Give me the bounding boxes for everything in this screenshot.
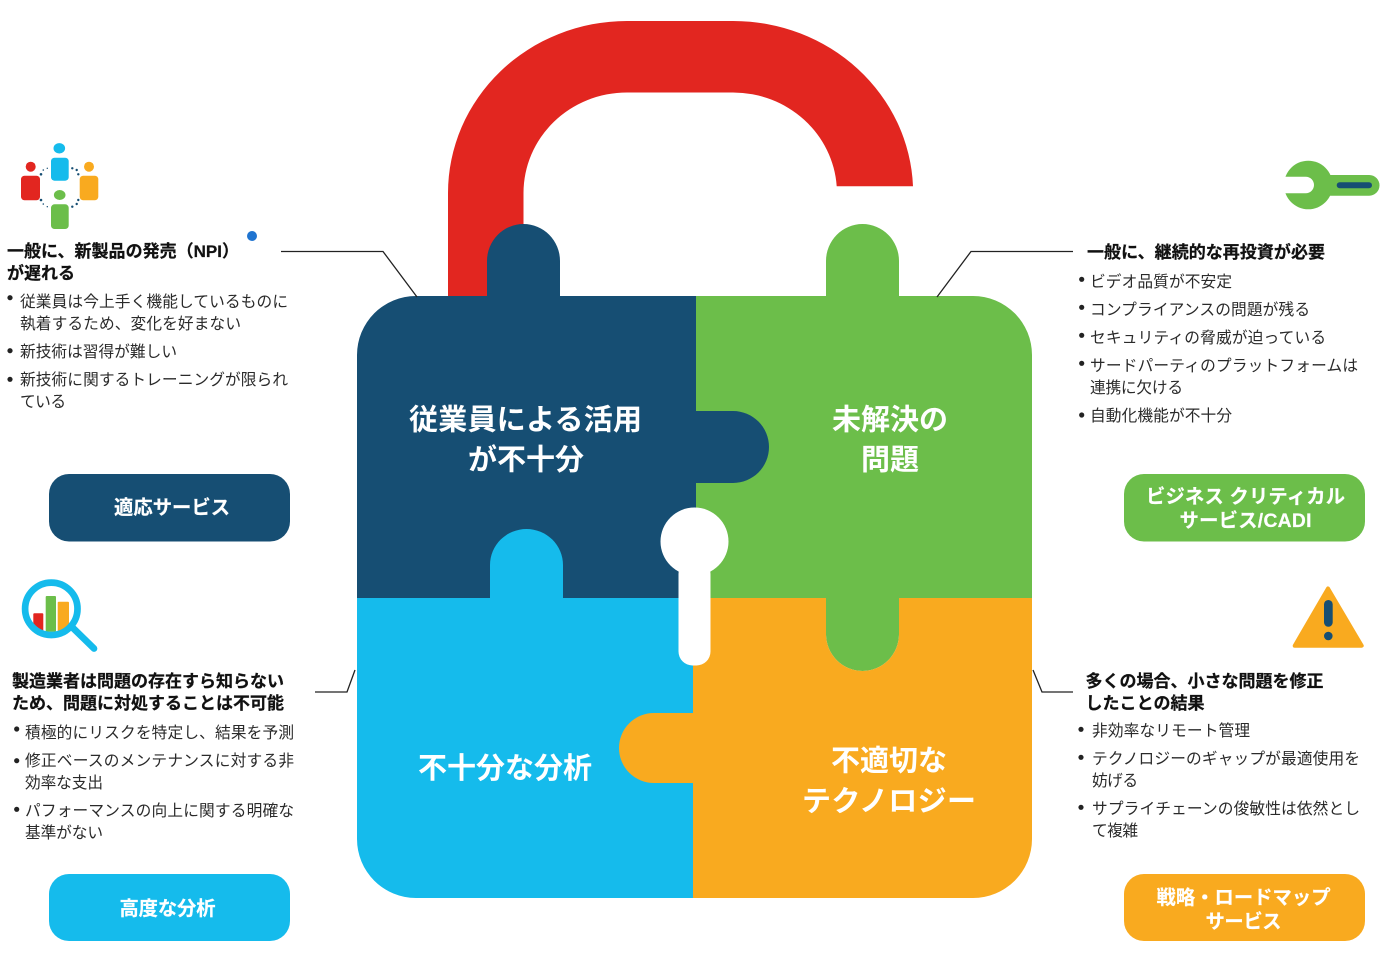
bullets: bottom right: 非効率なリモート管理	[1092, 722, 1250, 740]
bullets: top left: ている	[20, 394, 66, 411]
bullets: top right: ビデオ品質が不安定	[1090, 272, 1232, 291]
bullets: bottom right: て複雑	[1092, 822, 1138, 840]
heading: top right: 一般に、継続的な再投資が必要	[1087, 242, 1325, 262]
bullets: bottom left: 積極的にリスクを特定し、結果を予測	[25, 724, 294, 742]
button: business critical services / CADI: ビジネス クリティカル	[1146, 486, 1345, 508]
bullets: top right	[1079, 272, 1358, 425]
puzzle piece: orange, inadequate technology	[619, 598, 1032, 898]
text block: top left	[7, 241, 288, 411]
puzzle piece: green, unresolved issues	[696, 224, 1032, 671]
bullets: top left	[7, 293, 288, 411]
puzzle piece: light blue, insufficient analysis	[357, 529, 693, 898]
bullets: top right: 自動化機能が不十分	[1090, 407, 1232, 425]
padlock puzzle body	[357, 224, 1032, 898]
button: business critical services / CADI	[1124, 474, 1365, 542]
bullets: bottom left: 基準がない	[25, 824, 103, 842]
bullets: bottom right: 妨げる	[1092, 772, 1138, 790]
puzzle label: green: 問題	[861, 444, 919, 476]
heading: bottom right	[1086, 671, 1324, 713]
icon: people circle	[21, 143, 98, 229]
button: adaptive services: 適応サービス	[114, 497, 230, 519]
keyhole	[660, 508, 728, 666]
text block: top right	[1079, 242, 1358, 425]
puzzle label: orange: 不適切な	[831, 744, 947, 778]
bullets: bottom left: 修正ベースのメンテナンスに対する非	[25, 752, 294, 770]
button: strategy and roadmap services	[1124, 874, 1365, 941]
puzzle piece: navy, underused employees	[357, 224, 769, 598]
puzzle label: navy: が不十分	[468, 442, 584, 476]
button: advanced analytics: 高度な分析	[120, 897, 216, 920]
text block: bottom right	[1078, 671, 1360, 840]
bullets: bottom left: パフォーマンスの向上に関する明確な	[25, 802, 294, 820]
bullets: top right: コンプライアンスの問題が残る	[1090, 301, 1310, 319]
puzzle label: light blue: 不十分な分析	[418, 752, 592, 785]
padlock shackle	[448, 21, 913, 300]
bullets: top right: サードパーティのプラットフォームは	[1090, 357, 1358, 375]
bullets: bottom right: テクノロジーのギャップが最適使用を	[1092, 750, 1360, 768]
puzzle label: navy: 従業員による活用	[409, 404, 642, 436]
icon: warning triangle	[1295, 588, 1362, 646]
heading: bottom left: ため、問題に対処することは不可能	[12, 693, 284, 713]
connector line: bottom left	[315, 670, 355, 692]
bullets: bottom right	[1078, 722, 1360, 840]
puzzle label: orange	[802, 744, 976, 818]
connector line: top right	[937, 252, 1073, 297]
puzzle label: green: 未解決の	[832, 404, 948, 436]
decorative blue dot	[247, 231, 257, 241]
bullets: bottom right: サプライチェーンの俊敏性は依然とし	[1092, 800, 1360, 818]
bullets: top left: 新技術は習得が難しい	[20, 343, 177, 361]
bullets: top left: 従業員は今上手く機能しているものに	[20, 293, 288, 311]
bullets: top right: 連携に欠ける	[1090, 379, 1183, 397]
button: adaptive services	[49, 474, 290, 542]
bullets: bottom left: 効率な支出	[25, 774, 103, 792]
connector line: bottom right	[1033, 670, 1073, 692]
bullets: top left: 新技術に関するトレーニングが限られ	[20, 371, 288, 389]
button: advanced analytics	[49, 874, 290, 941]
icon: magnifier with bars	[25, 583, 94, 648]
heading: bottom right: したことの結果	[1086, 694, 1204, 713]
heading: top left	[7, 241, 239, 283]
button: strategy and roadmap services: サービス	[1206, 911, 1282, 933]
puzzle label: green	[832, 404, 948, 476]
puzzle label: orange: テクノロジー	[802, 786, 976, 818]
heading: top left: 一般に、新製品の発売（NPI）	[7, 241, 239, 261]
puzzle label: navy	[409, 404, 642, 476]
heading: bottom right: 多くの場合、小さな問題を修正	[1086, 671, 1324, 691]
bullets: bottom left	[14, 724, 294, 842]
bullets: top right: セキュリティの脅威が迫っている	[1090, 329, 1326, 347]
text block: bottom left	[12, 671, 294, 842]
heading: bottom left	[12, 671, 284, 713]
button: strategy and roadmap services: 戦略・ロードマップ	[1156, 886, 1330, 909]
heading: top left: が遅れる	[7, 263, 75, 283]
icon: wrench	[1283, 161, 1380, 209]
bullets: top left: 執着するため、変化を好まない	[20, 315, 241, 333]
connector line: top left	[281, 252, 417, 297]
heading: bottom left: 製造業者は問題の存在すら知らない	[12, 671, 284, 691]
button: business critical services / CADI: サービス/CADI	[1180, 510, 1312, 532]
